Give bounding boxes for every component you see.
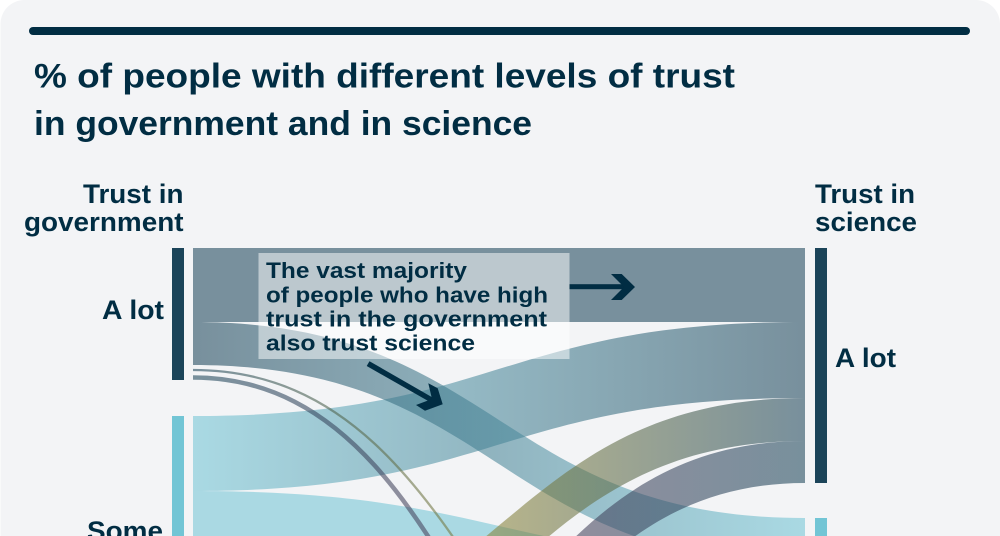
callout: also trust science <box>266 330 475 356</box>
callout: trust in the government <box>266 306 548 332</box>
axis heading: trust in science: science <box>815 207 917 237</box>
flow: a lot to lower group (thin olive) <box>193 368 454 536</box>
axis heading: trust in science <box>815 179 917 237</box>
flow: lowest group to a lot (purple) <box>576 441 805 536</box>
title <box>34 58 735 143</box>
title: % of people with different levels of trust <box>34 58 735 96</box>
label: right a lot: A lot <box>835 343 896 373</box>
flow: lower group to a lot (olive) <box>486 398 805 536</box>
flow: a lot to lowest group (purple) <box>193 375 430 536</box>
label: left a lot: A lot <box>102 295 164 325</box>
callout: of people who have high <box>266 282 548 308</box>
left node: some <box>172 416 184 536</box>
axis heading: trust in government: government <box>24 207 184 237</box>
axis heading: trust in government: Trust in <box>83 179 184 209</box>
flow: some to a lot <box>193 322 805 491</box>
right node: a lot <box>815 248 827 483</box>
flow: some to some <box>193 491 543 536</box>
right node: some <box>815 518 827 536</box>
flow: a lot to a lot <box>193 248 805 322</box>
title: in government and in science <box>34 105 532 143</box>
callout <box>258 253 570 359</box>
axis heading: trust in government <box>24 179 184 237</box>
axis heading: trust in science: Trust in <box>815 179 915 209</box>
top rule <box>29 27 970 35</box>
sankey flows <box>193 248 805 536</box>
flow: a lot to some <box>193 322 805 536</box>
arrow: down to a lot to some flow <box>367 361 443 411</box>
left node: a lot <box>172 248 184 380</box>
callout: The vast majority <box>266 258 468 283</box>
arrow: right to a lot flow <box>570 274 635 300</box>
